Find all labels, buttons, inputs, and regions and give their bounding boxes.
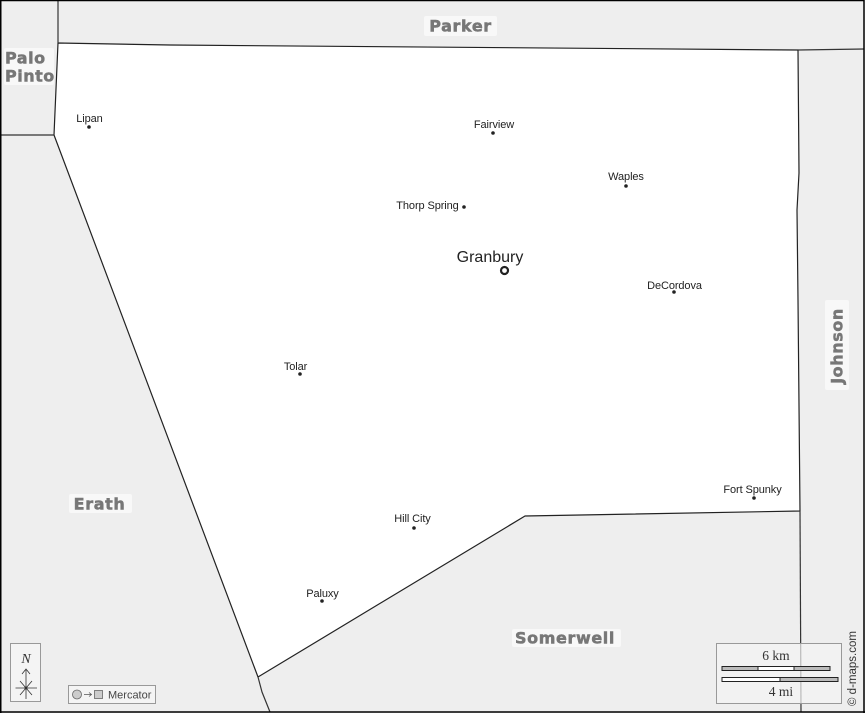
town: Paluxy: Paluxy (306, 588, 339, 600)
scale bar (716, 644, 842, 704)
town: Fort Spunky: Fort Spunky (723, 484, 782, 496)
label: Palo Pinto (4, 48, 55, 86)
scale bar: mi (722, 678, 838, 682)
credit: d-maps.com: © d-maps.com (847, 631, 859, 706)
town: Waples: Waples (608, 171, 644, 183)
panel: Hood County area (54, 43, 800, 677)
label: Somerwell: Somerwell (515, 628, 615, 648)
legend: Mercator projection (68, 686, 156, 704)
legend: Mercator projection: Mercator (108, 690, 152, 702)
label: Erath: Erath (74, 494, 125, 514)
town: Fairview: Fairview (474, 119, 514, 131)
label: Johnson (825, 300, 849, 390)
icon: north compass: N (20, 652, 31, 667)
town: Hill City: Hill City (394, 513, 431, 525)
town: DeCordova: DeCordova (647, 280, 703, 292)
scale bar: km (722, 666, 830, 670)
label: Palo Pinto: Pinto (5, 66, 55, 86)
town: Tolar: Tolar (284, 361, 308, 373)
town: Thorp Spring: Thorp Spring (396, 200, 459, 212)
icon: north compass (10, 644, 40, 702)
scale label: mi: 4 mi (769, 684, 793, 699)
label: Johnson: Johnson (828, 308, 846, 385)
label: Parker: Parker (429, 16, 492, 36)
label: Palo Pinto: Palo (5, 48, 46, 68)
town: Granbury (county seat) (457, 249, 523, 274)
town: Granbury (county seat): Granbury (457, 249, 523, 266)
town: Lipan: Lipan (76, 113, 103, 125)
scale label: km: 6 km (762, 648, 790, 663)
